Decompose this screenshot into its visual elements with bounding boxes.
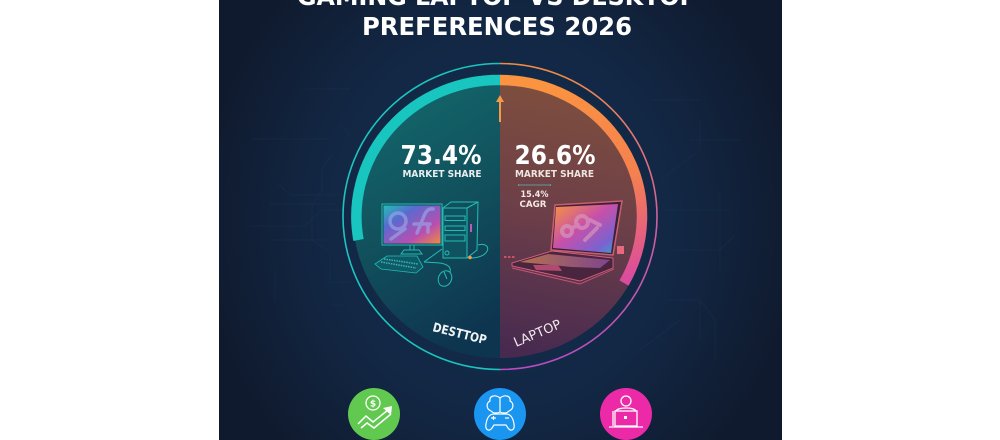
title <box>297 0 697 41</box>
laptop share figure: 26.6% <box>514 141 596 171</box>
background panel <box>219 0 782 440</box>
desktop share arc <box>356 80 500 240</box>
desktop share figure: MARKET SHARE <box>402 169 482 180</box>
icon: brain and gamepad <box>474 388 526 440</box>
icon: laptop computer <box>504 201 624 284</box>
laptop share arc <box>500 80 642 283</box>
icon: desktop computer <box>375 202 488 288</box>
circuit background pattern <box>250 89 740 360</box>
CAGR callout: CAGR <box>520 200 547 210</box>
panel: laptop half of disc <box>500 75 647 358</box>
outer thin ring <box>343 64 657 370</box>
desktop label: DESTTOP <box>431 319 488 347</box>
arrow <box>496 95 504 122</box>
icon: growth and money: $ <box>370 400 376 410</box>
title: PREFERENCES 2026 <box>362 12 632 41</box>
desktop share figure: 73.4% <box>400 141 482 171</box>
CAGR callout <box>518 184 550 210</box>
icon: growth and money <box>348 388 400 440</box>
CAGR callout: 15.4% <box>520 190 549 200</box>
laptop label: LAPTOP <box>512 317 564 351</box>
icon: person at laptop <box>600 388 652 440</box>
panel: desktop half of disc <box>353 75 500 358</box>
laptop share figure: MARKET SHARE <box>515 169 594 180</box>
